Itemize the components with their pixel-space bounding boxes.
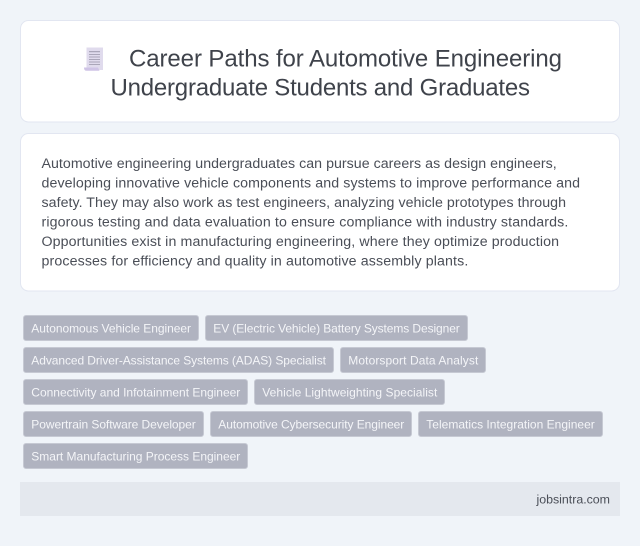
tag: Vehicle Lightweighting Specialist: Vehicle Lightweighting Specialist: [262, 385, 438, 399]
description panel: [20, 134, 620, 291]
tag: Motorsport Data Analyst: Motorsport Data Analyst: [348, 353, 479, 367]
icon: paper scroll: [84, 48, 103, 71]
title: Undergraduate Students and Graduates: [110, 75, 530, 102]
description text: developing innovative vehicle components and systems to improve performance and: [42, 176, 580, 192]
tag: Connectivity and Infotainment Engineer: [24, 380, 248, 404]
tag list: [24, 316, 602, 468]
tag: Automotive Cybersecurity Engineer: Automotive Cybersecurity Engineer: [218, 417, 404, 431]
footer source text: jobsintra.com: [536, 492, 610, 506]
description text: Automotive engineering undergraduates can pursue careers as design engineers,: [42, 156, 557, 172]
tag: Connectivity and Infotainment Engineer: Connectivity and Infotainment Engineer: [31, 385, 240, 399]
tag: ADAS Specialist: Advanced Driver-Assistance Systems (ADAS) Specialist: [31, 353, 327, 367]
description text: safety. They may also work as test engineers, analyzing vehicle prototypes through: [42, 195, 566, 211]
tag: Smart Manufacturing Process Engineer: [24, 444, 248, 468]
description text: Opportunities exist in manufacturing engineering, where they optimize production: [42, 234, 559, 250]
tag: Smart Manufacturing Process Engineer: Smart Manufacturing Process Engineer: [31, 449, 240, 463]
footer bar: [20, 482, 620, 516]
tag: Powertrain Software Developer: Powertrain Software Developer: [31, 417, 196, 431]
description text: [42, 156, 580, 269]
tag: Telematics Integration Engineer: [418, 412, 602, 436]
tag: ADAS Specialist: [24, 348, 334, 372]
title: Career Paths for Automotive Engineering: [129, 46, 562, 72]
tag: Autonomous Vehicle Engineer: [24, 316, 198, 340]
header panel: [20, 20, 620, 122]
tag: Autonomous Vehicle Engineer: Autonomous Vehicle Engineer: [31, 321, 191, 335]
tag: EV Battery Systems Designer: [206, 316, 468, 340]
tag: EV Battery Systems Designer: EV (Electric Vehicle) Battery Systems Designer: [213, 321, 460, 335]
title: [110, 46, 562, 102]
tag: Powertrain Software Developer: [24, 412, 204, 436]
tag: Vehicle Lightweighting Specialist: [254, 380, 444, 404]
description text: processes for efficiency and quality in automotive assembly plants.: [42, 253, 468, 269]
tag: Automotive Cybersecurity Engineer: [210, 412, 412, 436]
description text: rigorous testing and data evaluation to ensure compliance with industry standards.: [42, 214, 568, 230]
tag: Motorsport Data Analyst: [340, 348, 486, 372]
tag: Telematics Integration Engineer: Telematics Integration Engineer: [426, 417, 595, 431]
